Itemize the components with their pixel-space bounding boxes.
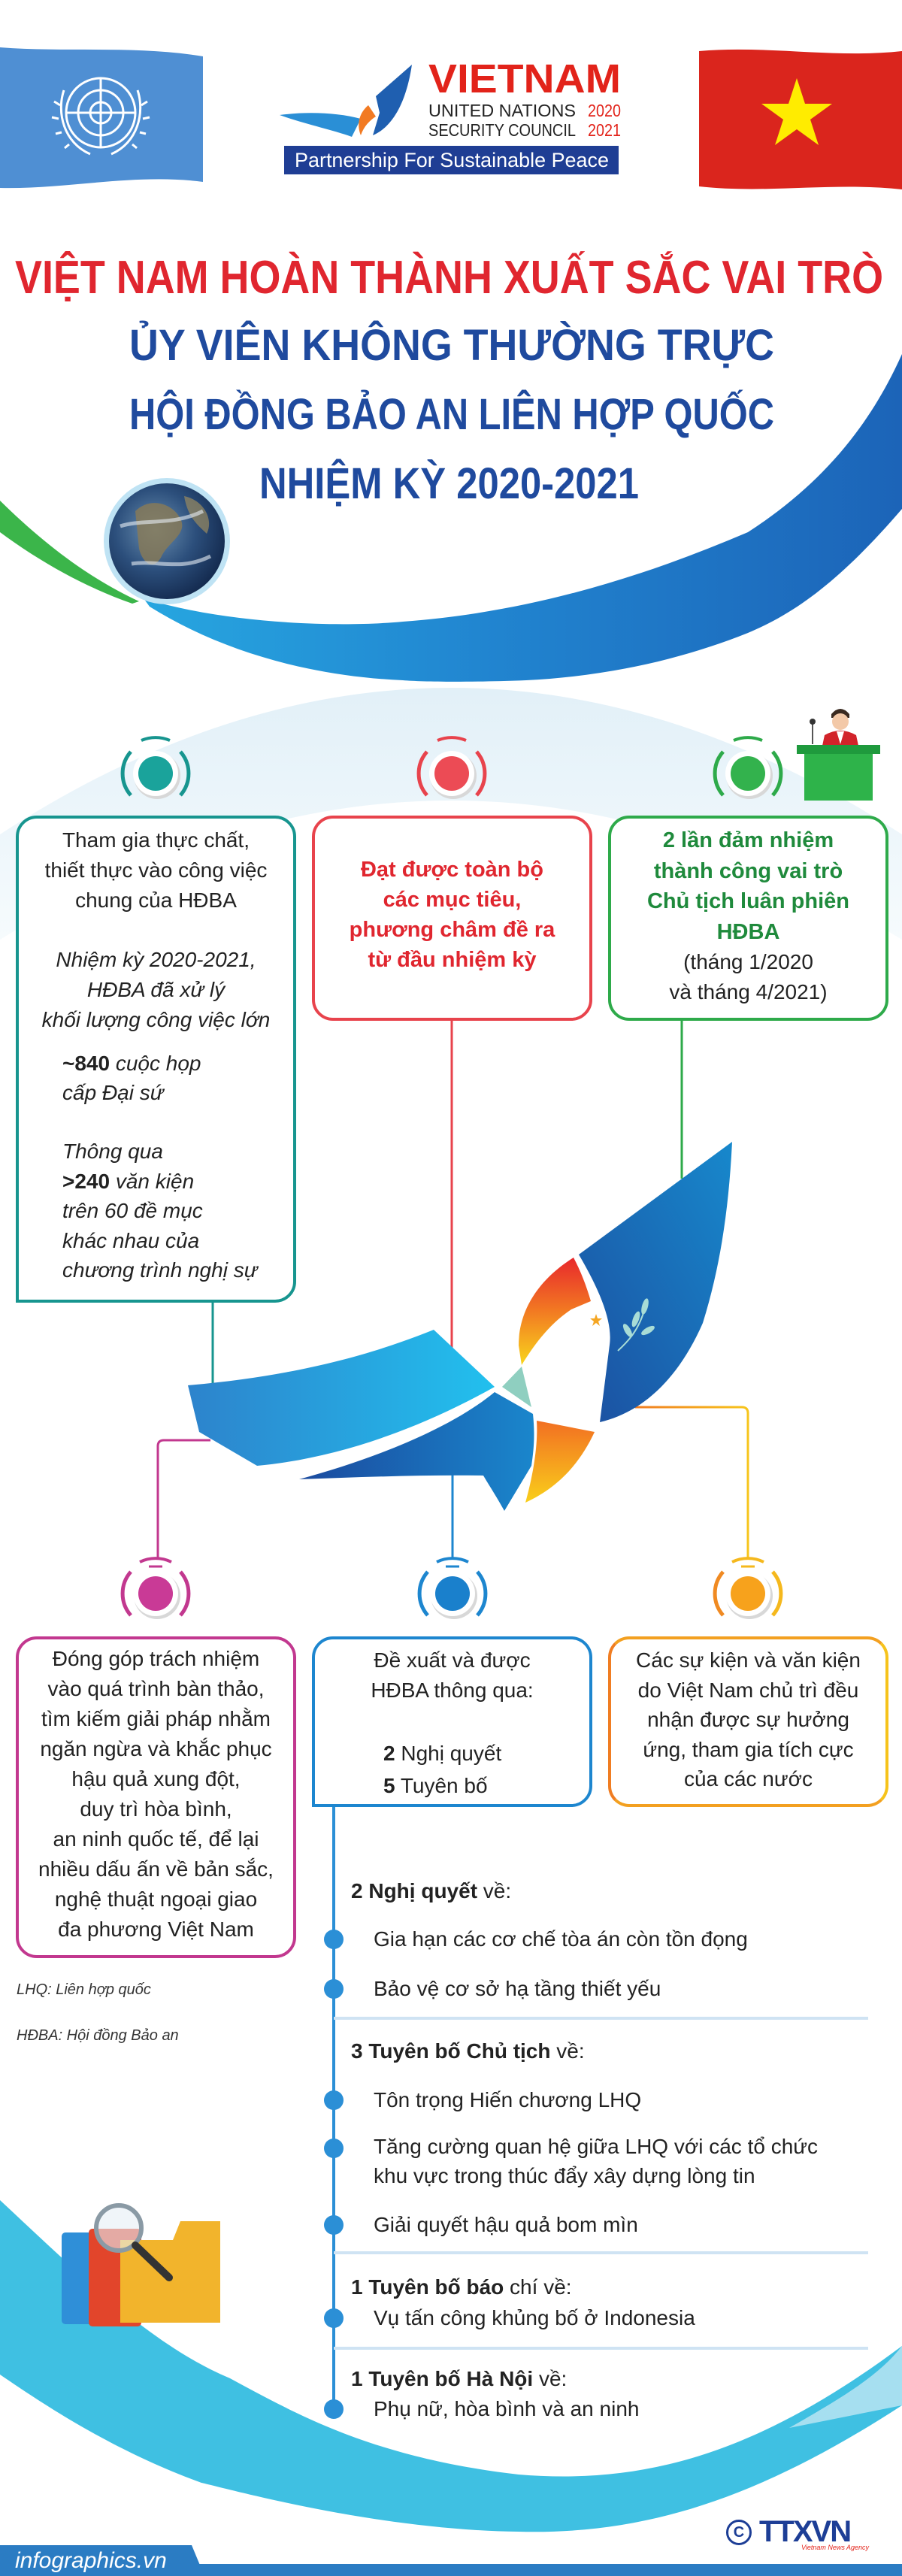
stat: documents: chương trình nghị sự xyxy=(62,1258,257,1282)
list: resolutions: Bảo vệ cơ sở hạ tầng thiết yếu xyxy=(374,1977,661,2000)
panel: proposals adopted xyxy=(312,1636,592,1807)
logo: TTXVN: TTXVN xyxy=(759,2515,850,2548)
header: UNSC logo: Partnership For Sustainable Peace xyxy=(295,149,609,171)
intro text: thiết thực vào công việc xyxy=(45,858,267,882)
header: UNSC logo xyxy=(280,60,621,174)
text xyxy=(371,1648,534,1702)
logo: TTXVN xyxy=(726,2515,869,2551)
list: press statement: Vụ tấn công khủng bố ở Indonesia xyxy=(374,2306,695,2329)
title xyxy=(15,251,883,508)
list: resolutions: 2 Nghị quyết về: xyxy=(351,1879,511,1902)
header: UN flag xyxy=(0,47,203,188)
green bold text: (tháng 1/2020 xyxy=(683,950,813,973)
intro text: Tham gia thực chất, xyxy=(62,828,250,852)
text: HĐBA thông qua: xyxy=(371,1678,534,1702)
stat: documents xyxy=(62,1140,259,1282)
text: Đóng góp trách nhiệm xyxy=(53,1647,259,1670)
header: Vietnam flag xyxy=(699,50,902,189)
red bold text: phương châm đề ra xyxy=(350,918,555,942)
text: hậu quả xung đột, xyxy=(71,1767,241,1790)
text: tìm kiếm giải pháp nhằm xyxy=(41,1707,271,1730)
panel: substantive participation xyxy=(16,816,296,1303)
icon: pink marker xyxy=(123,1558,189,1619)
green bold text: Chủ tịch luân phiên xyxy=(647,889,849,913)
text: nhiều dấu ấn về bản sắc, xyxy=(38,1857,274,1881)
footer: site name: infographics.vn xyxy=(15,2548,167,2573)
list: Hanoi statement xyxy=(351,2367,639,2420)
title line 4: NHIỆM KỲ 2020-2021 xyxy=(259,459,639,508)
list: presidential statements xyxy=(351,2039,818,2236)
counts: 5 Tuyên bố xyxy=(383,1774,488,1797)
icon: green marker xyxy=(715,737,781,799)
red bold text: từ đầu nhiệm kỳ xyxy=(368,948,537,972)
counts xyxy=(383,1742,502,1797)
connector: pink xyxy=(158,1440,210,1559)
list: press statement xyxy=(351,2275,695,2329)
list: presidential statements: Giải quyết hậu quả bom mìn xyxy=(374,2213,638,2236)
text: nghệ thuật ngoại giao xyxy=(55,1887,257,1911)
footnotes: HĐBA: Hội đồng Bảo an xyxy=(17,2027,179,2044)
italic note: Nhiệm kỳ 2020-2021, xyxy=(56,948,256,971)
header: UNSC logo: SECURITY COUNCIL xyxy=(428,120,576,140)
list: Hanoi statement: Phụ nữ, hòa bình và an ninh xyxy=(374,2397,639,2420)
text: ứng, tham gia tích cực xyxy=(643,1738,854,1760)
text: vào quá trình bàn thảo, xyxy=(48,1677,265,1700)
text: duy trì hòa bình, xyxy=(80,1797,232,1821)
text xyxy=(636,1648,861,1790)
stat: meetings xyxy=(62,1052,201,1104)
footer stripe xyxy=(0,2545,902,2576)
list: resolutions: Gia hạn các cơ chế tòa án còn tồn đọng xyxy=(374,1927,748,1951)
intro text: chung của HĐBA xyxy=(75,888,237,912)
red bold text xyxy=(350,858,555,972)
footnotes xyxy=(17,1981,179,2044)
icon: globe xyxy=(104,478,230,604)
title line 2: ỦY VIÊN KHÔNG THƯỜNG TRỰC xyxy=(129,321,774,370)
bottom timeline xyxy=(324,1807,868,2419)
text: Đề xuất và được xyxy=(374,1648,531,1672)
green bold text xyxy=(647,828,849,1003)
blue swoosh band xyxy=(144,354,902,682)
left timeline xyxy=(34,1052,52,1303)
stat: documents: khác nhau của xyxy=(62,1228,199,1252)
icon: red marker xyxy=(419,737,485,799)
connector: teal xyxy=(212,1303,213,1387)
red bold text: Đạt được toàn bộ xyxy=(361,858,543,882)
icon: teal marker xyxy=(123,737,189,799)
panel: rotating presidency xyxy=(608,816,888,1021)
logo: TTXVN: C xyxy=(734,2524,744,2541)
pale arc background xyxy=(0,688,902,940)
green bold text: và tháng 4/2021) xyxy=(669,980,828,1003)
green bold text: thành công vai trò xyxy=(654,858,843,882)
text: an ninh quốc tế, để lại xyxy=(53,1827,259,1851)
connector: yellow xyxy=(635,1407,748,1559)
stat: documents: >240 văn kiện xyxy=(62,1170,194,1192)
footnotes: LHQ: Liên hợp quốc xyxy=(17,1981,151,1998)
stat: meetings: cấp Đại sứ xyxy=(62,1081,163,1104)
list: presidential statements: Tôn trọng Hiến chương LHQ xyxy=(374,2088,641,2111)
panel: goals achieved xyxy=(312,816,592,1021)
dove xyxy=(188,1142,732,1511)
icon: podium speaker xyxy=(797,709,880,801)
list: presidential statements: Tăng cường quan hệ giữa LHQ với các tổ chức xyxy=(374,2135,818,2158)
intro text xyxy=(45,828,267,912)
text: ngăn ngừa và khắc phục xyxy=(40,1737,272,1760)
italic note: khối lượng công việc lớn xyxy=(42,1008,270,1031)
text xyxy=(38,1647,274,1941)
connector: green xyxy=(681,1021,683,1179)
italic note xyxy=(42,948,270,1031)
title line 3: HỘI ĐỒNG BẢO AN LIÊN HỢP QUỐC xyxy=(129,390,774,439)
list: presidential statements: 3 Tuyên bố Chủ tịch về: xyxy=(351,2039,585,2063)
green bold text: HĐBA xyxy=(717,920,779,944)
green swoosh xyxy=(0,501,139,604)
header: UNSC logo: UNITED NATIONS xyxy=(428,101,576,120)
list: Hanoi statement: 1 Tuyên bố Hà Nội về: xyxy=(351,2367,567,2390)
icon: orange marker xyxy=(715,1558,781,1619)
text: Các sự kiện và văn kiện xyxy=(636,1648,861,1672)
connector: blue xyxy=(451,1473,454,1559)
text: của các nước xyxy=(684,1767,813,1790)
text: do Việt Nam chủ trì đều xyxy=(638,1678,858,1702)
stat: meetings: ~840 cuộc họp xyxy=(62,1052,201,1075)
connector: red xyxy=(451,1021,453,1349)
green bold text: 2 lần đảm nhiệm xyxy=(663,828,834,852)
list: resolutions xyxy=(351,1879,748,2000)
red bold text: các mục tiêu, xyxy=(383,888,521,912)
list: press statement: 1 Tuyên bố báo chí về: xyxy=(351,2275,572,2299)
stat: documents: Thông qua xyxy=(62,1140,163,1163)
cyan bottom swoosh xyxy=(0,2200,902,2532)
list: presidential statements: khu vực trong thúc đẩy xây dựng lòng tin xyxy=(374,2164,755,2187)
italic note: HĐBA đã xử lý xyxy=(87,978,225,1001)
panel: responsible contribution xyxy=(16,1636,296,1958)
text: nhận được sự hưởng xyxy=(647,1708,849,1731)
text: đa phương Việt Nam xyxy=(58,1918,254,1941)
counts: 2 Nghị quyết xyxy=(383,1742,501,1765)
panel: events hosted xyxy=(608,1636,888,1807)
stat: documents: trên 60 đề mục xyxy=(62,1199,203,1222)
icon: blue marker xyxy=(419,1558,486,1619)
icon: folders with magnifier xyxy=(62,2205,220,2326)
logo: TTXVN: Vietnam News Agency xyxy=(801,2544,869,2551)
